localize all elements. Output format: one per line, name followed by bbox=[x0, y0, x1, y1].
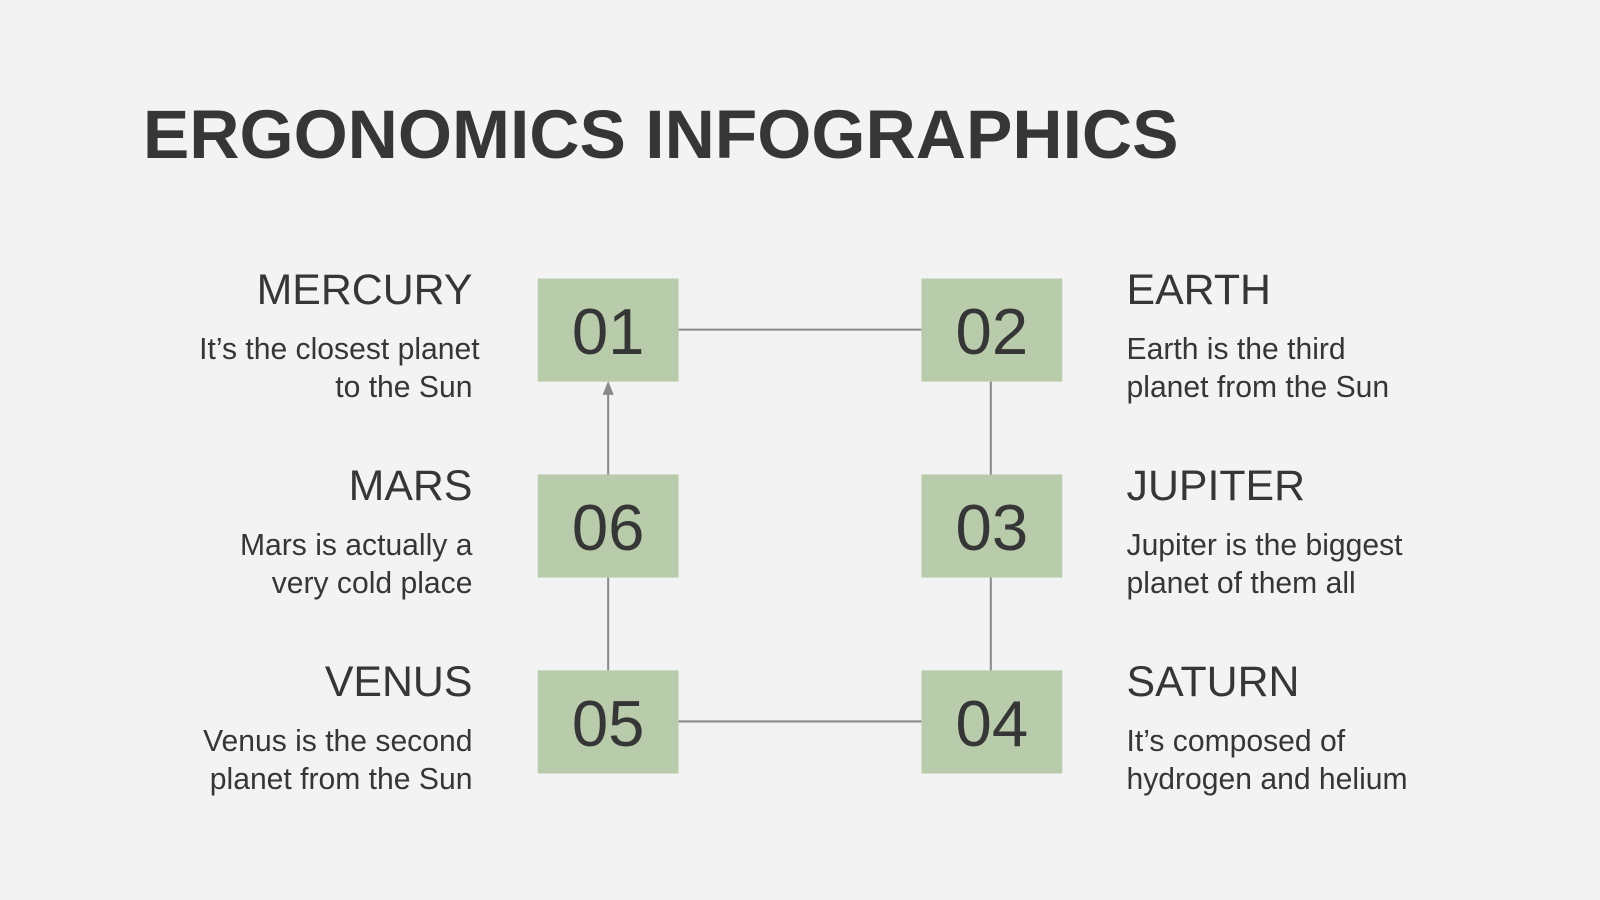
box 06 bbox=[538, 474, 679, 578]
text: jupiter: Jupiter is the biggest bbox=[1127, 529, 1403, 562]
box 02: 02 bbox=[956, 295, 1028, 368]
text: mercury: MERCURY bbox=[257, 266, 472, 314]
box 05: 05 bbox=[572, 687, 644, 760]
text: earth: planet from the Sun bbox=[1127, 371, 1389, 404]
text: mars: MARS bbox=[349, 462, 472, 510]
box 04 bbox=[921, 670, 1062, 773]
box 05 bbox=[538, 670, 679, 773]
text: jupiter: planet of them all bbox=[1127, 567, 1356, 600]
text: saturn bbox=[1127, 658, 1408, 796]
connectors bbox=[604, 330, 991, 721]
box 04: 04 bbox=[956, 687, 1028, 760]
text: venus: VENUS bbox=[325, 658, 472, 706]
text: mars: Mars is actually a bbox=[240, 529, 473, 562]
text: jupiter: JUPITER bbox=[1127, 462, 1305, 510]
text: mars bbox=[240, 462, 473, 600]
box 03 bbox=[921, 474, 1062, 578]
text: venus: planet from the Sun bbox=[210, 763, 472, 796]
box 03: 03 bbox=[956, 491, 1028, 564]
text: earth: EARTH bbox=[1127, 266, 1271, 314]
text: saturn: It’s composed of bbox=[1127, 725, 1346, 758]
title: ERGONOMICS INFOGRAPHICS bbox=[143, 97, 1179, 173]
text: mercury: to the Sun bbox=[335, 371, 472, 404]
text: venus: Venus is the second bbox=[203, 725, 472, 758]
box 01 bbox=[538, 279, 679, 382]
text: earth bbox=[1127, 266, 1389, 404]
box 02 bbox=[921, 279, 1062, 382]
text: jupiter bbox=[1127, 462, 1403, 600]
text: saturn: hydrogen and helium bbox=[1127, 763, 1408, 796]
text: earth: Earth is the third bbox=[1127, 333, 1346, 366]
box 06: 06 bbox=[572, 491, 644, 564]
text: saturn: SATURN bbox=[1127, 658, 1299, 706]
box 01: 01 bbox=[572, 295, 644, 368]
text: mars: very cold place bbox=[272, 567, 472, 600]
text: venus bbox=[203, 658, 472, 796]
text: mercury bbox=[199, 266, 480, 404]
text: mercury: It’s the closest planet bbox=[199, 333, 480, 366]
